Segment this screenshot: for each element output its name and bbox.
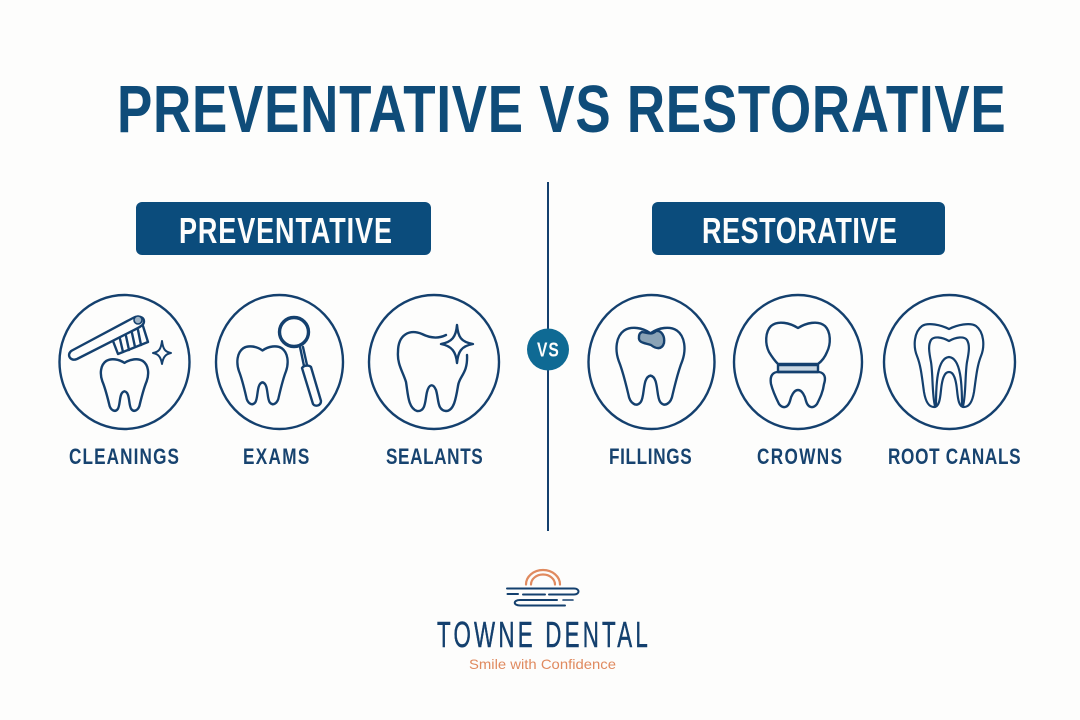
panel: preventative header <box>136 202 431 255</box>
item: cleanings <box>60 295 190 470</box>
label: exams: EXAMS <box>243 445 309 470</box>
label: root canals: ROOT CANALS <box>888 445 1021 470</box>
icon: tooth with filled cavity <box>588 295 714 429</box>
vs badge <box>527 328 569 370</box>
item: crowns <box>734 295 862 470</box>
item: fillings <box>588 295 714 470</box>
label: fillings: FILLINGS <box>609 445 692 470</box>
center divider line <box>547 182 549 531</box>
panel: preventative header: PREVENTATIVE <box>179 210 392 251</box>
icon: dental crown on tooth <box>734 295 862 429</box>
label: crowns: CROWNS <box>757 445 842 470</box>
icon: tooth with sparkle <box>369 295 499 429</box>
vs badge: VS <box>537 339 559 361</box>
tagline: Smile with Confidence <box>469 656 616 672</box>
title: PREVENTATIVE VS RESTORATIVE <box>117 71 1006 146</box>
panel: restorative header: RESTORATIVE <box>702 210 897 251</box>
item: sealants <box>369 295 499 470</box>
icon: toothbrush over tooth <box>60 295 190 429</box>
wordmark: TOWNE DENTAL <box>437 616 648 655</box>
icon: tooth and dental mirror <box>216 295 343 429</box>
icon: tooth cross-section with root canals <box>884 295 1015 429</box>
item: root canals <box>884 295 1021 470</box>
item: exams <box>216 295 343 470</box>
panel: restorative header <box>652 202 945 255</box>
label: cleanings: CLEANINGS <box>69 445 179 470</box>
label: sealants: SEALANTS <box>386 445 483 470</box>
icon: sun and waves <box>507 570 578 606</box>
logo: towne dental <box>437 570 648 672</box>
